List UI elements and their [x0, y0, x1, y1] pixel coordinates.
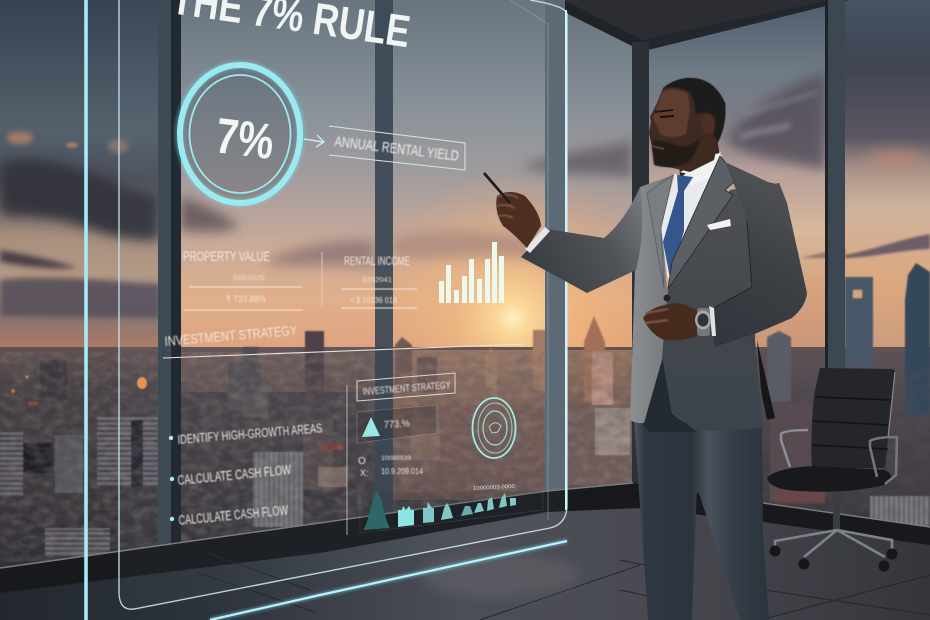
- ear: [702, 114, 714, 134]
- foreground buildings: [0, 402, 930, 557]
- collar: [680, 152, 721, 186]
- property value block: 8883929: [233, 275, 265, 282]
- yield metric box with triangle: 773.%: [384, 419, 410, 431]
- office chair: [767, 368, 898, 572]
- investment strategy sub-panel: [357, 373, 455, 401]
- clasped hand: [643, 303, 703, 340]
- bullet: calculate cash flow repeat: CALCULATE CASH FLOW: [178, 502, 289, 528]
- seat: [767, 466, 891, 492]
- brow: [655, 110, 673, 112]
- 7 percent ring: 7%: [213, 107, 277, 170]
- city texture: [0, 352, 632, 562]
- bullet: calculate cash flow repeat: [170, 502, 289, 528]
- mini teal chart: 10000003 0000: [473, 484, 515, 492]
- forehead and cheek highlight: [653, 89, 690, 137]
- city skyline through the window: [0, 263, 930, 562]
- bullet: identify high-growth areas: [169, 420, 323, 447]
- window frames and ceiling: [158, 0, 850, 560]
- pocket square: [707, 219, 731, 230]
- bullet: identify high-growth areas: IDENTIFY HIGH-GROWTH AREAS: [177, 420, 323, 447]
- necktie: [663, 175, 693, 278]
- right arm sleeve: [710, 162, 807, 347]
- investment strategy sub-panel: INVESTMENT STRATEGY: [362, 379, 451, 398]
- jacket tail: [757, 340, 775, 420]
- bullet: calculate cash flow: [170, 462, 292, 488]
- right armrest: [870, 437, 897, 484]
- rental income block: RENTAL INCOME: [344, 254, 410, 268]
- bar chart: [439, 242, 504, 303]
- shirt cuff on right wrist: [709, 306, 716, 336]
- left armrest: [781, 430, 808, 467]
- head: [649, 78, 725, 172]
- lips: [652, 146, 664, 149]
- chair base: [770, 495, 898, 572]
- eye: [660, 116, 674, 117]
- rental income block: [341, 254, 417, 308]
- data readout: 10.9.209.014: [381, 466, 423, 476]
- glass display panel: [86, 0, 567, 620]
- shirt cuff: [525, 227, 550, 253]
- shirt front: [661, 153, 722, 280]
- clouds: [0, 72, 930, 318]
- right lapel: [668, 156, 739, 289]
- strategy bullet list: [169, 420, 323, 528]
- hair: [663, 78, 725, 142]
- office floor and window sill: [0, 483, 930, 620]
- data readout: O: [358, 456, 366, 467]
- wristwatch: [695, 308, 711, 336]
- 7 percent ring: [179, 65, 301, 203]
- sunset sky background: [0, 0, 930, 360]
- city lights: [11, 376, 147, 405]
- data readout: 10088939: [381, 455, 411, 462]
- pointing arm sleeve: [521, 187, 642, 293]
- annual rental yield label: ANNUAL RENTAL YIELD: [334, 134, 460, 165]
- investment strategy heading: INVESTMENT STRATEGY: [164, 322, 298, 349]
- beard: [652, 138, 700, 167]
- jacket left front: [630, 175, 673, 423]
- centre button: [664, 294, 670, 302]
- rental income block: 8392041: [362, 277, 392, 284]
- left lapel: [647, 175, 673, 288]
- data readout: [358, 455, 423, 478]
- data readout: X:: [360, 468, 369, 478]
- trousers: [634, 420, 769, 620]
- property value block: ₹ 733.88%: [226, 294, 266, 304]
- bullet: calculate cash flow: CALCULATE CASH FLOW: [177, 462, 292, 488]
- backrest: [811, 368, 895, 468]
- mini teal chart: [360, 484, 543, 533]
- waist shadow: [642, 355, 697, 432]
- distant towers: [40, 263, 930, 417]
- arrow to annual rental yield: [304, 135, 324, 147]
- businessman: [484, 78, 807, 620]
- property value block: PROPERTY VALUE: [183, 249, 270, 264]
- yield metric box with triangle: [357, 405, 437, 443]
- annual rental yield label: [329, 126, 465, 170]
- neck: [678, 130, 720, 182]
- rental income block: < $ 10236 018: [350, 295, 397, 305]
- column one: [158, 0, 181, 560]
- investment strategy heading: [163, 322, 525, 358]
- pen: [484, 173, 510, 203]
- circular target icon: [472, 398, 516, 458]
- jacket right front: [662, 183, 780, 431]
- property value block: [183, 249, 303, 310]
- pointing hand: [496, 192, 541, 248]
